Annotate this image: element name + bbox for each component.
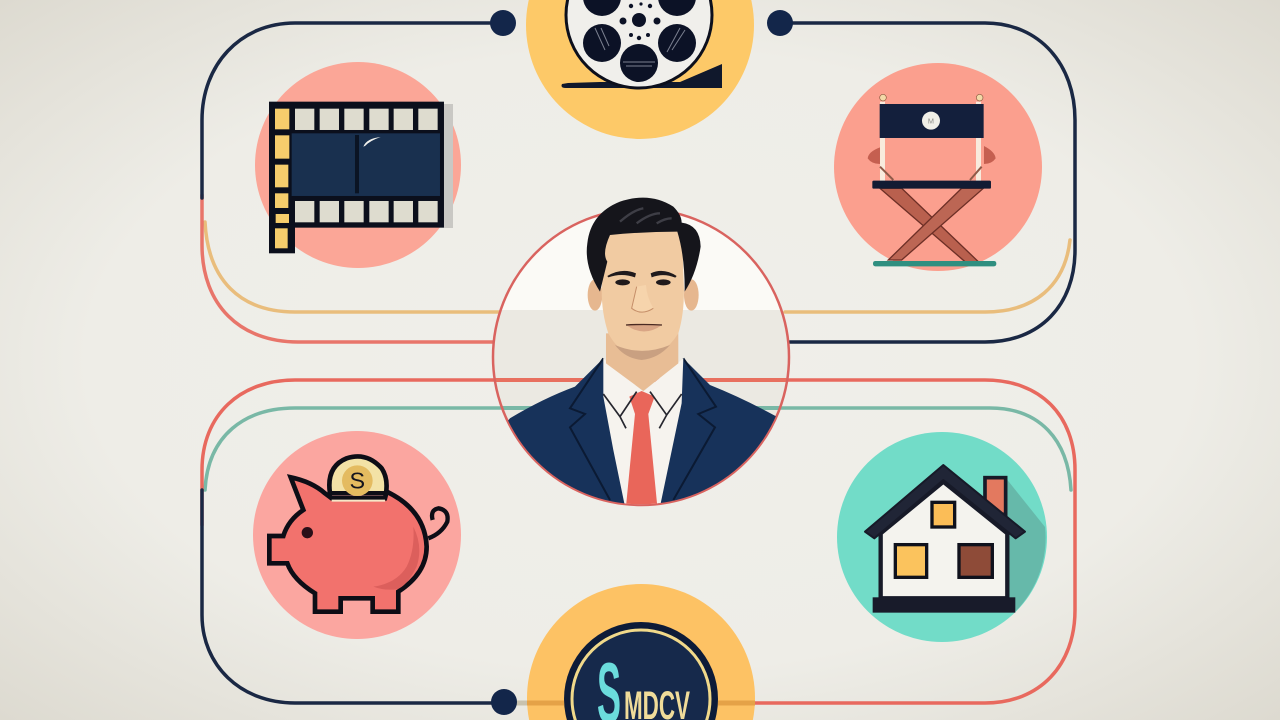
portrait ring [493,209,789,505]
nose [632,285,653,312]
connector node: top left [490,10,516,36]
panel: central portrait [490,198,792,510]
suit [500,358,787,510]
connector node: top right [767,10,793,36]
connector node: bottom left [491,689,517,715]
neck [606,333,678,391]
brows and eyes [607,271,677,285]
jaw shadow [615,345,670,360]
icon: film reel [566,0,712,88]
icon: house [865,465,1025,613]
face [602,223,684,359]
panel: piggy bank [253,431,461,639]
mouth [626,324,662,331]
collar lines [603,392,682,428]
icon: director's chair: M [928,116,934,125]
icon: piggy bank: S [350,468,365,494]
panel: director's chair [834,63,1042,271]
portrait figure [500,198,787,510]
badge lettering [597,646,690,720]
connector lines [202,23,1075,703]
panel: film strip [255,62,461,268]
panel: top film reel [526,0,754,139]
necktie [626,391,657,507]
icon: reel base [562,64,722,88]
hair [587,198,701,292]
hair highlights [620,208,672,223]
icon: film strip [269,102,444,253]
panel: bottom show badge [516,584,755,720]
panel: house [837,432,1047,642]
shirt [603,358,683,507]
icon: piggy bank [269,456,448,612]
icon: director's chair [868,94,996,266]
ears [588,279,699,311]
